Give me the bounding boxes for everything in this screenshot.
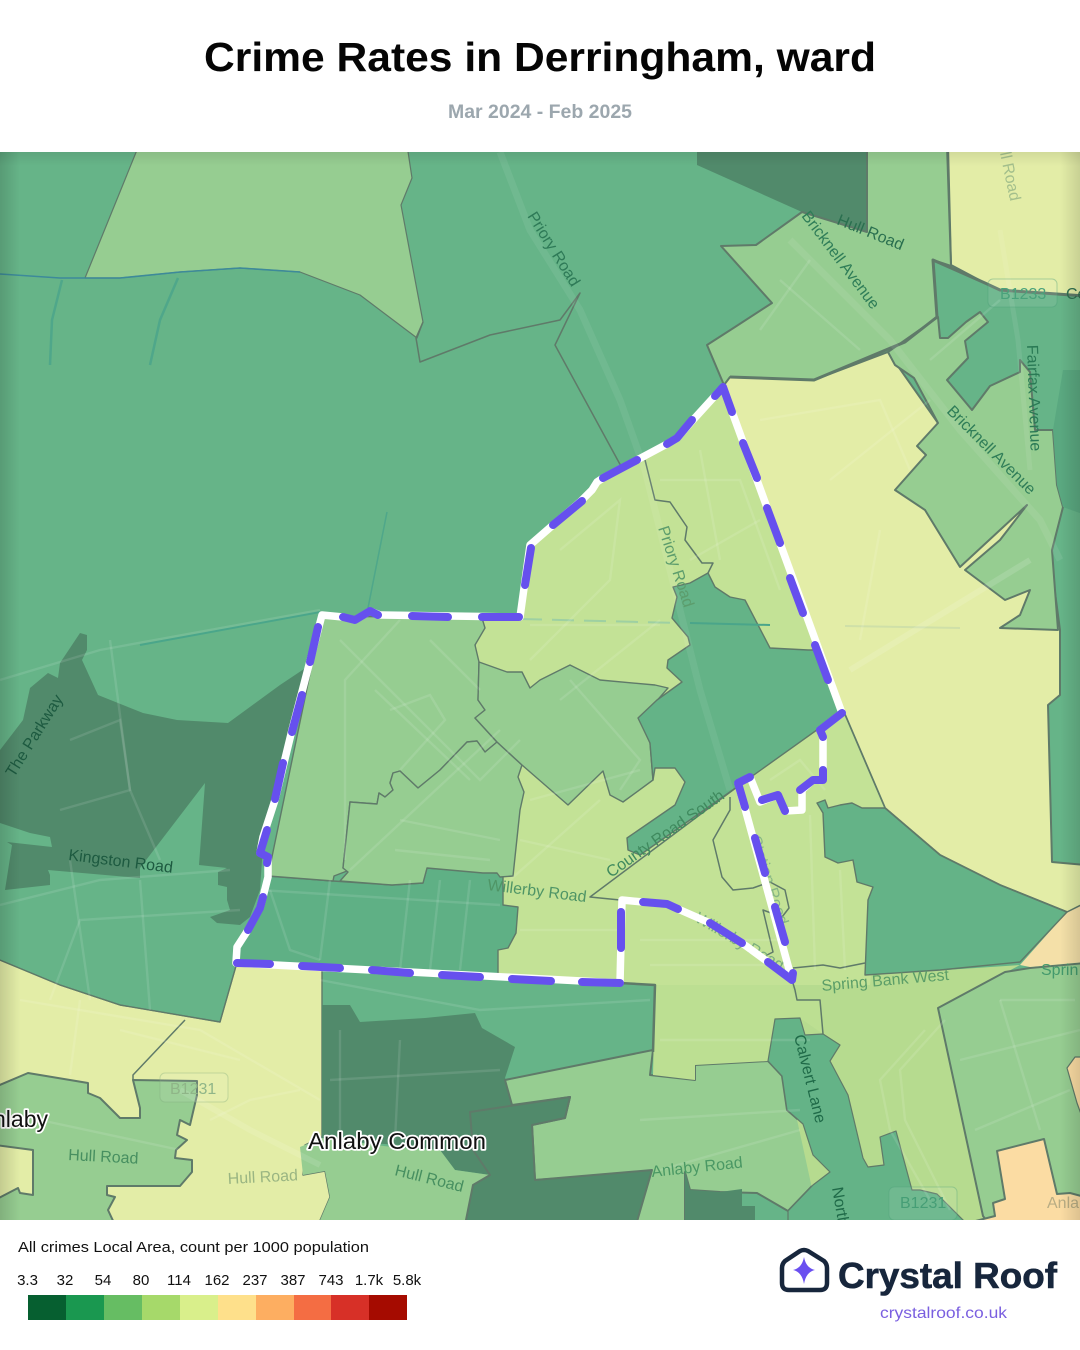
area: southern yellow zone (0, 958, 330, 1225)
area: ward centre dark zone (627, 573, 842, 855)
legend values: 80 (133, 1272, 149, 1289)
area: tan east edge (1066, 1056, 1080, 1113)
area: Hull Road small yellow pocket (0, 1145, 33, 1200)
area: dark north zone (697, 152, 866, 230)
road labels: Spring Bank West (821, 967, 950, 995)
icon: house with star (782, 1250, 827, 1290)
road labels: Fairfax Avenue (1023, 345, 1044, 452)
road labels: Hull Road (227, 1167, 298, 1188)
legend title: All crimes Local Area, count per 1000 population (18, 1239, 369, 1256)
area: dark Anlaby Common zone (322, 1005, 518, 1175)
area: ward east dark zone (817, 800, 1067, 975)
road labels: Hull Road (393, 1162, 465, 1196)
road labels: Hull Road (835, 212, 906, 254)
area: north-east yellow zone (948, 145, 1080, 296)
legend values: 32 (57, 1272, 73, 1289)
road labels: Station Road (746, 834, 791, 927)
subtitle: date range: Mar 2024 - Feb 2025 (448, 102, 632, 123)
area: ward core yellow-green (476, 387, 885, 985)
road labels: Kingston Road (68, 847, 174, 877)
area: Spring Bank south zone (775, 965, 1020, 1225)
ward boundary purple dashes (237, 387, 842, 983)
area: ward south-west green zone (272, 868, 519, 973)
area: ward centre light zone (475, 662, 668, 805)
road badge B1231 west (160, 1073, 228, 1102)
road labels: Sprin (1041, 962, 1078, 979)
legend colour scale (28, 1295, 407, 1320)
road badge B1231 south: B1231 (900, 1195, 946, 1212)
area: Calvert Lane strip (768, 1018, 968, 1225)
area: western dark zone (0, 633, 310, 925)
road labels: ll Road (996, 150, 1023, 203)
area: Bricknell Avenue zone north (707, 145, 951, 385)
road badge B1233 (988, 279, 1057, 307)
legend values (17, 1272, 422, 1289)
area: Fairfax Avenue zone (888, 312, 1063, 630)
area: central-south light zone (505, 1050, 830, 1225)
road badge B1231 west: B1231 (170, 1081, 216, 1098)
wordmark: Crystal Roof (838, 1255, 1058, 1296)
place label Anlaby Common: Anlaby Common (308, 1128, 486, 1154)
area: Anlaby Common light zone (300, 1138, 490, 1225)
legend values: 237 (242, 1272, 268, 1289)
boundary lines (0, 260, 1080, 1080)
road labels: Willerby Road (692, 910, 787, 974)
road badge B1233: B1233 (1000, 286, 1046, 303)
streams (0, 268, 960, 645)
legend values: 3.3 (17, 1272, 38, 1289)
logo: Crystal Roof (782, 1250, 1058, 1322)
road labels (3, 150, 1080, 1227)
area: eastern yellow zone (723, 352, 1080, 915)
road labels: Priory Road (524, 209, 583, 290)
website link: crystalroof.co.uk (880, 1305, 1008, 1322)
road labels: Anla (1047, 1195, 1079, 1212)
area: ward west light zone (268, 616, 497, 881)
ward boundary white line (236, 387, 842, 983)
road labels: Hull Road (68, 1147, 139, 1168)
road labels: The Parkway (3, 692, 67, 780)
legend (17, 1239, 422, 1320)
road badge B1231 south (889, 1187, 957, 1220)
road labels: County Road South (604, 787, 728, 881)
area: south-east light zone (938, 963, 1080, 1225)
legend values: 387 (280, 1272, 306, 1289)
legend values: 162 (204, 1272, 230, 1289)
road labels: Priory Road (654, 524, 696, 610)
road network (0, 152, 1080, 1210)
area: Hull Road west zone (0, 1073, 197, 1225)
road labels: Anlaby Road (651, 1154, 744, 1181)
title: Crime Rates in Derringham, ward (204, 34, 876, 80)
area: ward centre-west light zone (340, 741, 524, 885)
road labels: Willerby Road (487, 877, 587, 906)
legend values: 54 (95, 1272, 111, 1289)
legend values: 743 (318, 1272, 344, 1289)
road labels: Calvert Lane (790, 1033, 829, 1125)
road labels: North (828, 1186, 852, 1227)
road labels: Bricknell Avenue (943, 403, 1039, 498)
area: tan east triangle (1020, 903, 1080, 967)
legend values: 1.7k (355, 1272, 384, 1289)
area: tan south-east zone (976, 1138, 1080, 1220)
area: Willerby south strip (653, 985, 787, 1080)
area: eastern edge band (1053, 370, 1080, 515)
legend values: 114 (167, 1272, 191, 1289)
area: north-west low crime zone (85, 145, 423, 338)
area: dark south pocket (685, 1174, 755, 1220)
road labels: Bricknell Avenue (798, 208, 882, 313)
area: dark south zone (465, 1097, 652, 1225)
legend values: 5.8k (393, 1272, 422, 1289)
